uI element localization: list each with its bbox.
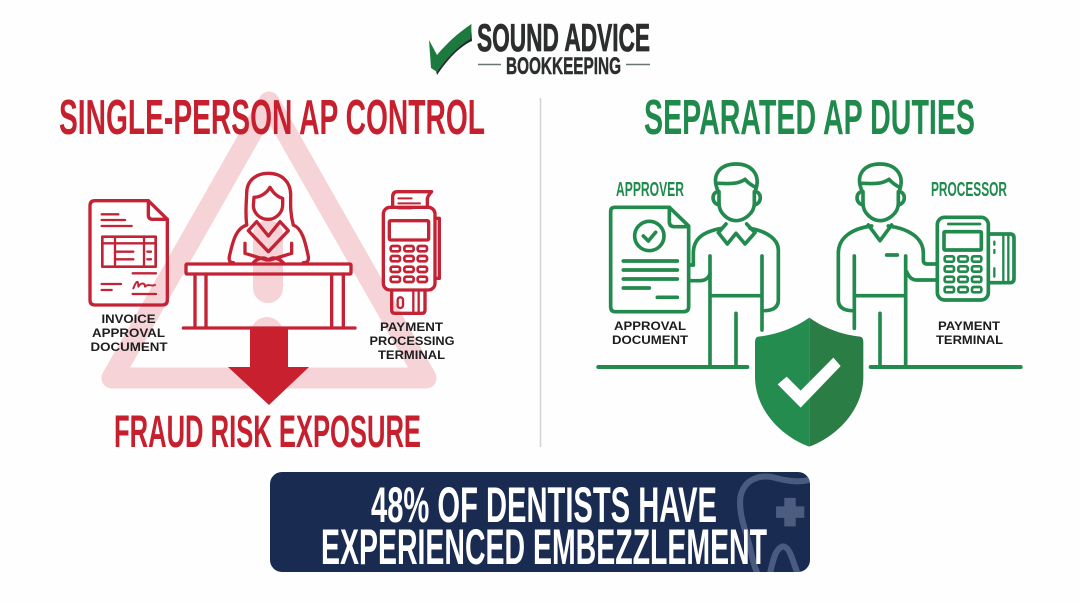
labels: invoice approval document: DOCUMENT: [90, 340, 168, 354]
logo: Sound Advice Bookkeeping: [429, 17, 650, 80]
icon: green check mark: [429, 24, 472, 75]
labels: invoice approval document: [90, 312, 168, 354]
labels: approval document: [612, 319, 689, 347]
logo subtitle: BOOKKEEPING: [506, 53, 621, 80]
arrow: down to fraud risk: [228, 327, 309, 405]
icon: approver figure: [690, 164, 778, 365]
labels: payment terminal: [936, 319, 1003, 347]
labels: payment processing terminal: PROCESSING: [370, 334, 454, 348]
icon: processor figure: [838, 164, 937, 365]
labels: approval document: DOCUMENT: [612, 333, 689, 347]
green line icons: [598, 164, 1021, 447]
labels: payment processing terminal: [370, 320, 454, 362]
panel: single-person AP control: [59, 91, 485, 457]
labels: payment processing terminal: PAYMENT: [380, 320, 444, 334]
labels: payment processing terminal: TERMINAL: [378, 348, 445, 362]
labels: invoice approval document: APPROVAL: [92, 326, 165, 340]
logo wordmark: SOUND ADVICE: [477, 17, 650, 60]
icon: payment terminal: [383, 192, 439, 313]
heading: fraud risk exposure: FRAUD RISK EXPOSURE: [114, 406, 421, 457]
heading: single-person AP control: SINGLE-PERSON AP CONTROL: [59, 91, 485, 145]
icon: approval document: [611, 207, 689, 312]
label: processor: PROCESSOR: [931, 179, 1007, 201]
label: approver: APPROVER: [616, 179, 684, 201]
warning triangle background: [112, 102, 426, 378]
ground line: [598, 361, 1021, 373]
icon: invoice document: [90, 201, 167, 305]
banner text line 1: 48% OF DENTISTS HAVE: [371, 477, 717, 533]
red line icons: [90, 173, 439, 328]
labels: invoice approval document: INVOICE: [102, 312, 156, 326]
icon: woman at desk: [183, 173, 355, 328]
labels: approval document: APPROVAL: [614, 319, 686, 333]
labels: payment terminal: PAYMENT: [938, 319, 1001, 333]
panel: separated AP duties: [598, 91, 1021, 447]
icon: payment terminal: [937, 217, 1014, 300]
labels: payment terminal: TERMINAL: [936, 333, 1003, 347]
callout banner: 48% statistic: [270, 472, 817, 580]
icon: tooth with cross: [740, 477, 817, 580]
icon: shield with check: [755, 318, 863, 447]
